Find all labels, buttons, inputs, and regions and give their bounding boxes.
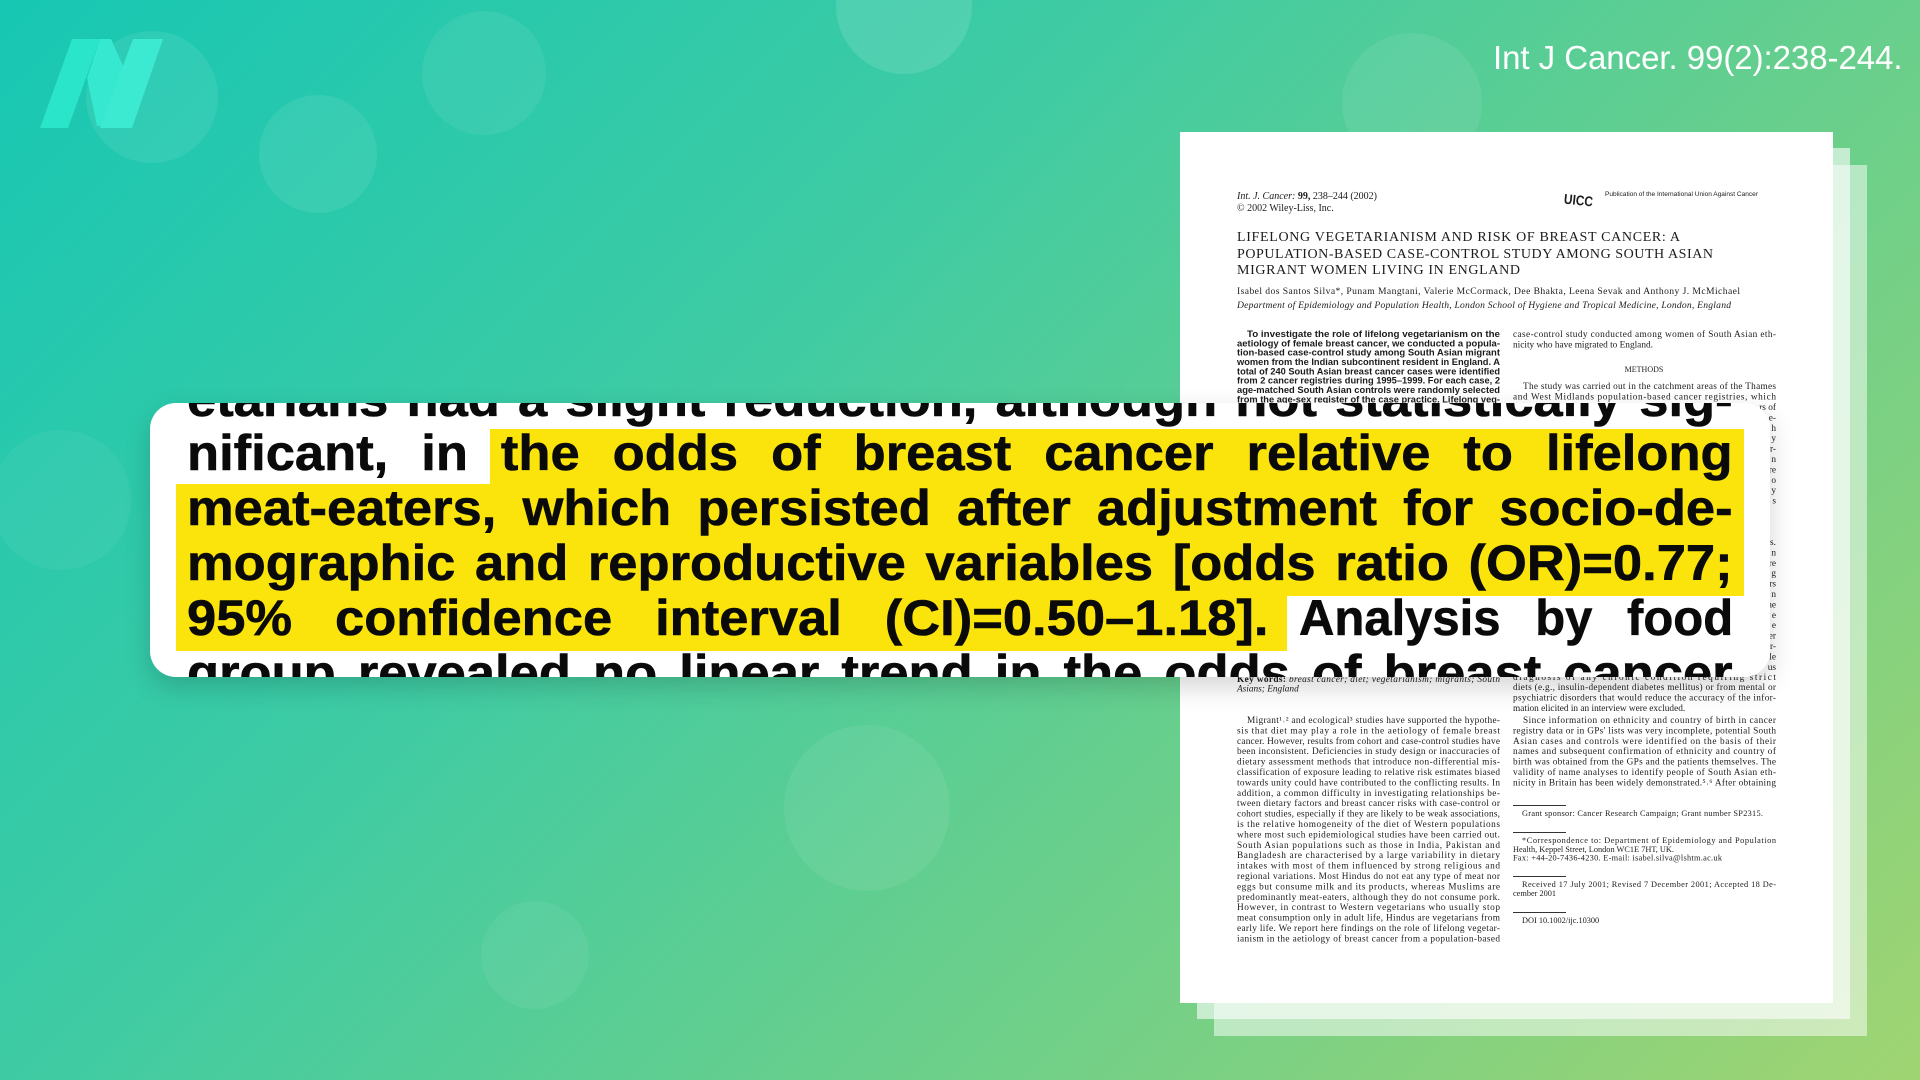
right column: line endings visible beside the card: e- — [1769, 413, 1776, 423]
right column: line endings visible beside the card: rs of — [1759, 402, 1777, 413]
methods text continued: Asian cases and controls were identified on the basis of their — [1513, 736, 1777, 747]
introduction text: where most such epidemiological studies have been carried out. — [1237, 830, 1500, 840]
magnified abstract text: meat-eaters, which persisted after adjustment for socio-de- — [187, 480, 1733, 536]
authors — [1236, 286, 1740, 311]
footnotes — [1513, 805, 1777, 925]
footnotes: *Correspondence to: Department of Epidemiology and Population — [1522, 836, 1777, 845]
right column: line endings visible beside the card: r- — [1770, 445, 1776, 455]
right column: line endings visible beside the card: e — [1772, 611, 1776, 621]
right column: line endings visible beside the card: s. — [1770, 538, 1776, 548]
right column: introduction end and methods: and West Midlands population-based cancer registries, which — [1513, 392, 1776, 402]
UICC logo: Publication of the International Union Against Cancer — [1605, 191, 1759, 198]
methods text continued: psychiatric disorders that would reduce the accuracy of the infor- — [1513, 692, 1776, 704]
yellow highlight — [176, 429, 1744, 651]
introduction text: dietary assessment methods that introduce non-differential mis- — [1237, 757, 1500, 768]
introduction text: ianism in the aetiology of breast cancer from a population-based — [1237, 933, 1500, 944]
right column: line endings visible beside the card: r- — [1770, 642, 1776, 652]
UICC logo — [1563, 191, 1759, 210]
abstract: women from the Indian subcontinent resident in England. A — [1236, 357, 1501, 367]
introduction text: cohort studies, especially if they are likely to be weak associations, — [1237, 809, 1500, 820]
right column: introduction end and methods: case-control study conducted among women of South Asian eth- — [1513, 329, 1776, 340]
right column: line endings visible beside the card: rs — [1769, 580, 1776, 590]
right column: line endings visible beside the card: n — [1771, 590, 1776, 600]
magnified abstract text: Analysis by food — [1299, 590, 1733, 646]
right column: line endings visible beside the card: y — [1771, 434, 1776, 444]
introduction text — [1237, 716, 1501, 944]
right column: line endings visible beside the card: y — [1771, 486, 1776, 496]
right column: introduction end and methods — [1513, 329, 1776, 402]
introduction text: been inconsistent. Deficiencies in study design or inaccuracies of — [1237, 746, 1501, 757]
introduction text: meat consumption only in adult life, Hindus are vegetarians from — [1237, 913, 1501, 924]
footnotes: DOI 10.1002/ijc.10300 — [1522, 916, 1599, 925]
abstract: tion-based case-control study among South Asian migrant — [1237, 348, 1500, 358]
right column: line endings visible beside the card — [1759, 402, 1777, 673]
abstract — [1236, 329, 1501, 404]
introduction text: cancer. However, results from cohort and case-control studies have — [1237, 736, 1500, 747]
introduction text: is the relative homogeneity of the diet of Western populations — [1237, 819, 1500, 830]
right column: line endings visible beside the card: us — [1768, 663, 1776, 673]
right column: introduction end and methods: METHODS — [1625, 365, 1663, 374]
authors: Isabel dos Santos Silva*, Punam Mangtani, Valerie McCormack, Dee Bhakta, Leena Sevak and Anthony J. McMichael — [1237, 286, 1740, 297]
right column: line endings visible beside the card: n — [1771, 548, 1776, 558]
methods text continued: mation elicited in an interview were excluded. — [1513, 704, 1685, 714]
right column: line endings visible beside the card: g — [1771, 569, 1776, 579]
magnified abstract text: nificant, in the odds of breast cancer relative to lifelong — [187, 425, 1733, 481]
paper: journal article page — [1180, 132, 1833, 1003]
keywords — [1236, 675, 1500, 694]
abstract: from the age-sex register of the case practice. Lifelong veg- — [1237, 394, 1500, 404]
right column: line endings visible beside the card: er — [1769, 632, 1777, 642]
right column: line endings visible beside the card: e — [1772, 621, 1776, 631]
methods text continued: diets (e.g., insulin-dependent diabetes mellitus) or from mental or — [1513, 682, 1777, 693]
introduction text: addition, a common difficulty in investigating relationships be- — [1237, 788, 1500, 799]
introduction text: Migrant¹˒² and ecological³ studies have supported the hypothe- — [1247, 716, 1500, 726]
methods text continued — [1513, 672, 1777, 788]
introduction text: However, in contrast to Western vegetarians who usually stop — [1237, 903, 1500, 913]
keywords: Asians; England — [1236, 684, 1299, 694]
methods text continued: validity of name analyses to identify people of South Asian eth- — [1513, 767, 1776, 778]
footnotes: Received 17 July 2001; Revised 7 December 2001; Accepted 18 De- — [1522, 880, 1776, 889]
keywords: Key words: breast cancer; diet; vegetarianism; migrants; South — [1237, 675, 1500, 685]
journal reference: Int. J. Cancer: 99, 238–244 (2002) — [1236, 191, 1377, 202]
methods text continued: birth was obtained from the GPs and the patients themselves. The — [1513, 757, 1776, 768]
introduction text: towards unity could have contributed to the conflicting results. In — [1237, 777, 1500, 788]
paper title — [1237, 230, 1713, 278]
paper title: MIGRANT WOMEN LIVING IN ENGLAND — [1237, 263, 1520, 278]
abstract: from 2 cancer registries during 1995–1999. For each case, 2 — [1237, 376, 1500, 386]
abstract: age-matched South Asian controls were randomly selected — [1237, 385, 1500, 395]
paper stack: middle sheet — [1197, 148, 1850, 1019]
right column: introduction end and methods: nicity who have migrated to England. — [1513, 340, 1653, 350]
paper stack: back sheet — [1214, 165, 1867, 1036]
right column: line endings visible beside the card: o — [1771, 476, 1776, 486]
UICC logo: UICC — [1563, 191, 1594, 210]
citation: Int J Cancer. 99(2):238-244. — [1493, 39, 1903, 76]
introduction text: predominantly meat-eaters, although they do not consume pork. — [1237, 893, 1500, 903]
introduction text: Bangladesh are characterised by a large variability in dietary — [1237, 851, 1500, 861]
right column: line endings visible beside the card: re — [1769, 465, 1776, 475]
paper title: LIFELONG VEGETARIANISM AND RISK OF BREAST CANCER: A — [1237, 230, 1681, 245]
footnotes: Fax: +44-20-7436-4230. E-mail: isabel.silva@lshtm.ac.uk — [1513, 854, 1723, 862]
introduction text: classification of exposure leading to relative risk estimates biased — [1237, 767, 1500, 778]
authors: Department of Epidemiology and Population Health, London School of Hygiene and Tropical Medicine, London, England — [1236, 300, 1731, 311]
right column: line endings visible beside the card: h — [1771, 424, 1776, 434]
introduction text: sis that diet may play a role in the aetiology of female breast — [1237, 725, 1500, 736]
magnified abstract text: 95% confidence interval (CI)=0.50–1.18]. — [187, 590, 1268, 646]
footnotes: Grant sponsor: Cancer Research Campaign; Grant number SP2315. — [1522, 809, 1763, 818]
journal reference: © 2002 Wiley-Liss, Inc. — [1237, 203, 1334, 214]
methods text continued: diagnosis of any chronic condition requiring strict — [1513, 672, 1776, 683]
abstract: To investigate the role of lifelong vegetarianism on the — [1247, 329, 1500, 339]
magnified abstract text — [187, 403, 1733, 677]
abstract: aetiology of female breast cancer, we conducted a popula- — [1237, 338, 1500, 348]
right column: line endings visible beside the card: ne — [1767, 600, 1776, 610]
logo: N mark — [40, 39, 163, 128]
methods text continued: Since information on ethnicity and country of birth in cancer — [1523, 715, 1777, 726]
journal reference — [1236, 191, 1377, 214]
methods text continued: registry data or in GPs' lists was very incomplete, potential South — [1513, 726, 1776, 736]
footnotes: cember 2001 — [1513, 889, 1556, 898]
abstract: total of 240 South Asian breast cancer cases were identified — [1237, 366, 1500, 376]
magnified abstract text: mographic and reproductive variables [odds ratio (OR)=0.77; — [187, 535, 1733, 591]
introduction text: intakes with most of them influenced by strong religious and — [1237, 861, 1500, 872]
right column: line endings visible beside the card: re — [1769, 559, 1776, 569]
right column: introduction end and methods: The study was carried out in the catchment areas of the Thames — [1523, 381, 1776, 392]
methods text continued: nicity in Britain has been widely demonstrated.⁵˒⁶ After obtaining — [1513, 777, 1776, 788]
introduction text: eggs but consume milk and its products, whereas Muslims are — [1237, 882, 1500, 892]
paper title: POPULATION-BASED CASE-CONTROL STUDY AMONG SOUTH ASIAN — [1237, 247, 1713, 262]
right column: line endings visible beside the card: n — [1771, 455, 1776, 465]
right column: line endings visible beside the card: le — [1769, 652, 1776, 662]
magnified quote card — [150, 403, 1770, 677]
footnotes: Health, Keppel Street, London WC1E 7HT, UK. — [1513, 845, 1674, 854]
introduction text: regional variations. Most Hindus do not eat any type of meat nor — [1237, 871, 1501, 882]
methods text continued: names and subsequent confirmation of ethnicity and country of — [1513, 746, 1777, 757]
introduction text: South Asian populations such as those in India, Pakistan and — [1237, 841, 1500, 851]
right column: line endings visible beside the card: s — [1772, 497, 1776, 507]
introduction text: early life. We report here findings on the role of lifelong vegetar- — [1237, 923, 1500, 934]
introduction text: tween dietary factors and breast cancer risks with case-control or — [1237, 798, 1501, 809]
